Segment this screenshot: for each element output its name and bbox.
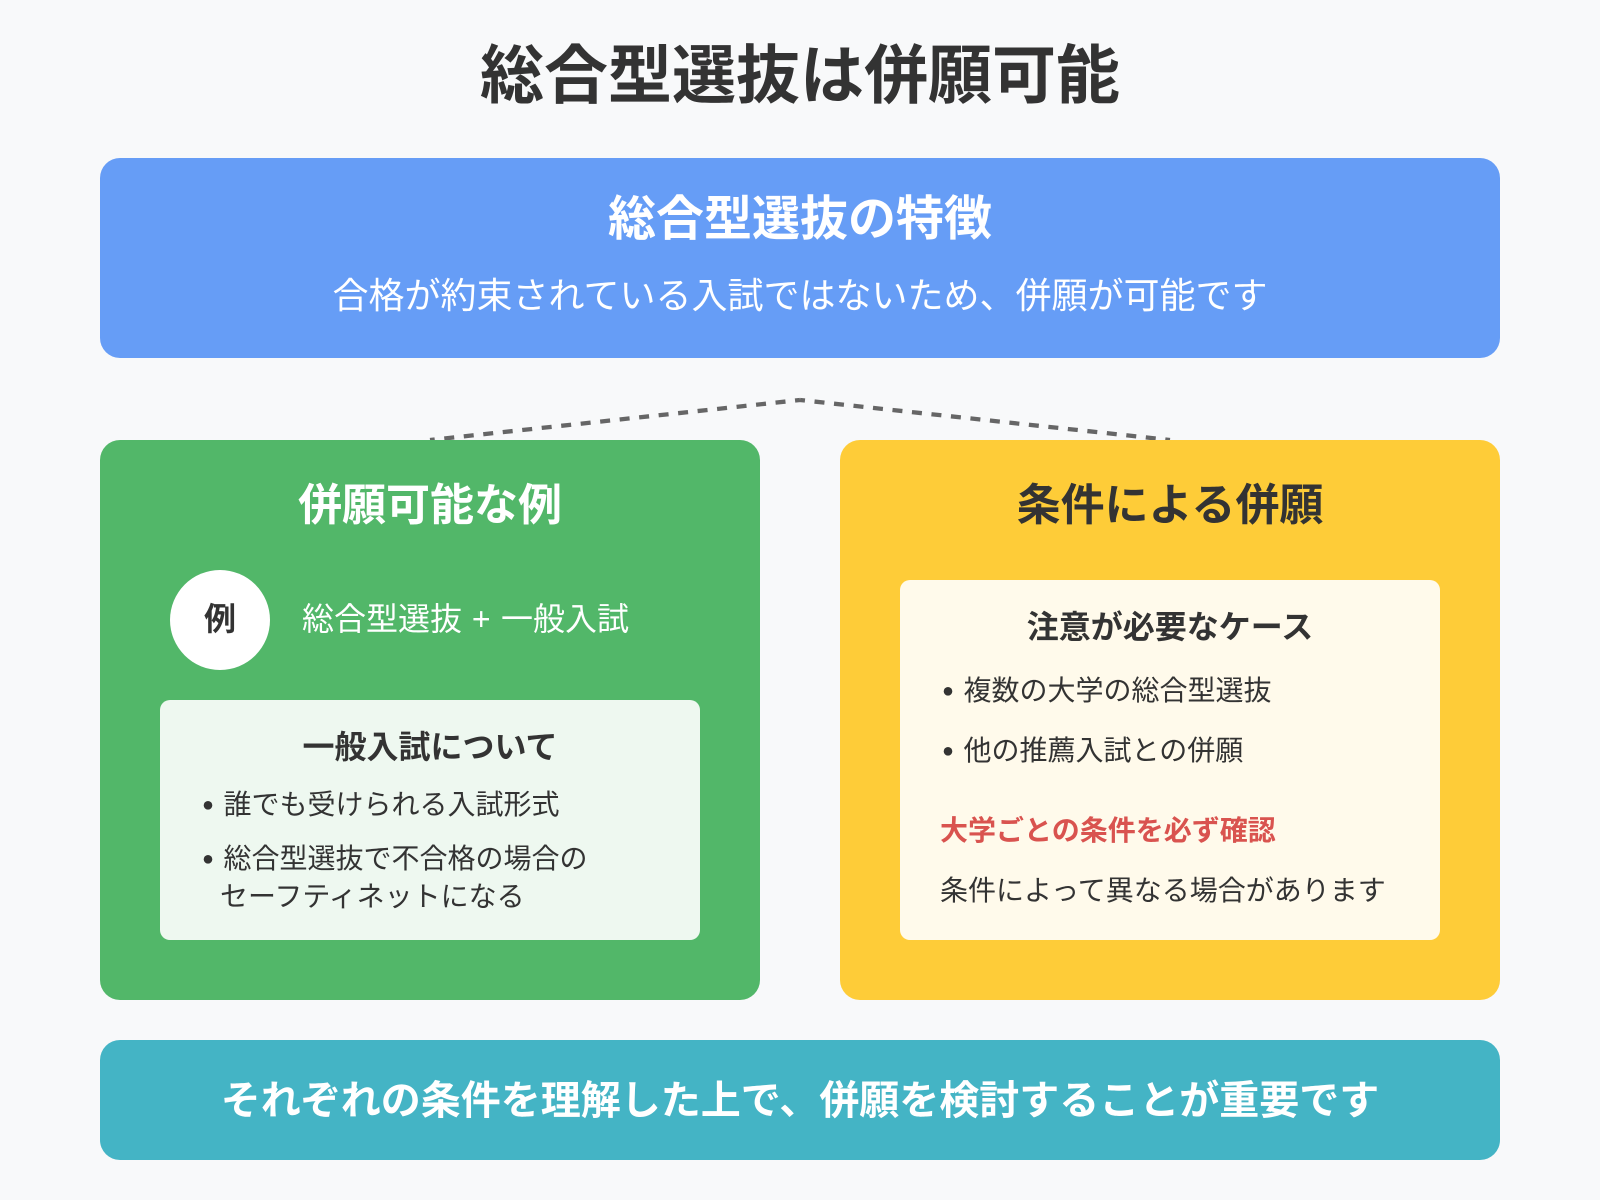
card heading: 一般入試について (302, 729, 558, 765)
banner description: 合格が約束されている入試ではないため、併願が可能です (333, 275, 1267, 316)
warning: 大学ごとの条件を必ず確認 (940, 814, 1276, 846)
icon: example circle: 例 (204, 601, 236, 637)
panel heading: 条件による併願 (1017, 481, 1323, 530)
bullet 1: 誰でも受けられる入試形式 (224, 789, 560, 820)
panel: conditional applications (840, 440, 1500, 1000)
bullet 2 continuation: セーフティネットになる (220, 881, 525, 912)
example text: 総合型選抜 + 一般入試 (302, 601, 629, 637)
note: 条件によって異なる場合があります (940, 875, 1386, 906)
bullet 2: 総合型選抜で不合格の場合の (224, 843, 588, 874)
panel heading: 併願可能な例 (298, 481, 562, 530)
bullet 1: 複数の大学の総合型選抜 (964, 675, 1272, 706)
conclusion text: それぞれの条件を理解した上で、併願を検討することが重要です (221, 1079, 1379, 1123)
icon: example circle (170, 570, 270, 670)
card heading: 注意が必要なケース (1027, 609, 1313, 645)
bullet 2: 他の推薦入試との併願 (964, 735, 1243, 766)
card: general exam (160, 700, 700, 940)
card: caution cases (900, 580, 1440, 940)
title: 総合型選抜は併願可能 (480, 40, 1120, 112)
panel: combinable example (100, 440, 760, 1000)
banner heading: 総合型選抜の特徴 (608, 193, 992, 246)
arrow: dashed connector (430, 400, 1170, 440)
panel: conclusion banner (100, 1040, 1500, 1160)
panel: features banner (100, 158, 1500, 358)
